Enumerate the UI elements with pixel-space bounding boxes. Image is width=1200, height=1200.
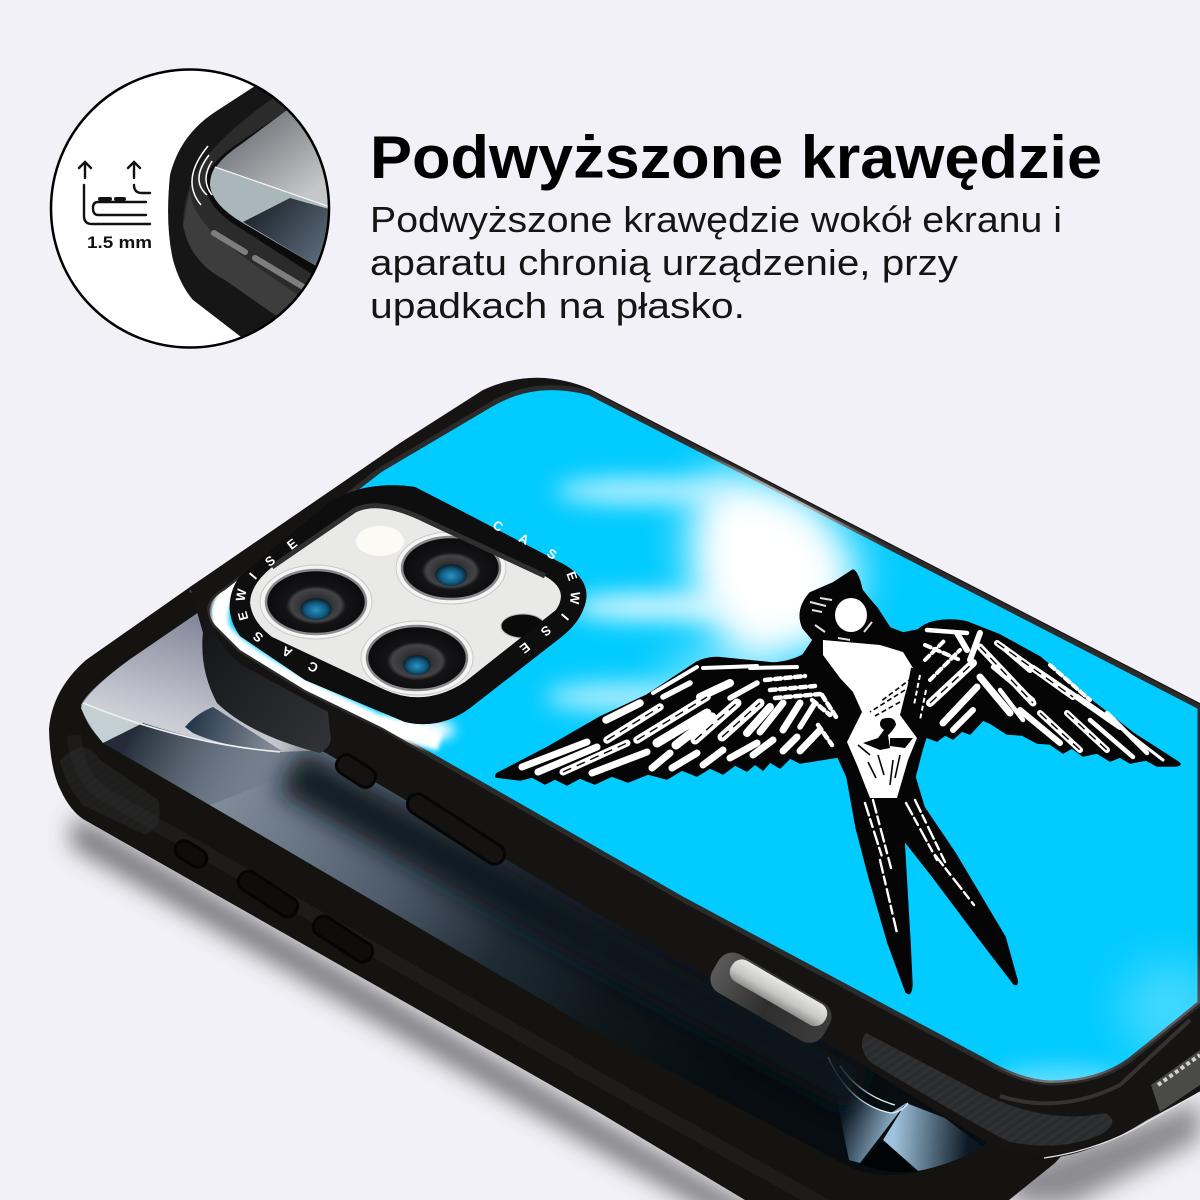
icon label: 1.5 mm: 1.5 mm	[87, 233, 152, 252]
ring lettering: CASEWISE: E	[563, 569, 581, 583]
head flecks	[810, 598, 872, 640]
flash	[356, 526, 404, 556]
description text: aparatu chronią urządzenie, przy	[370, 242, 958, 283]
side wall shadow of upper phone	[290, 770, 860, 1090]
shadow beneath phones	[70, 815, 1200, 1200]
bird belly	[823, 640, 917, 798]
lens 1	[260, 565, 372, 639]
bottom corner bumper	[862, 1033, 1112, 1146]
ring lettering: CASEWISE: E	[235, 610, 251, 622]
lens 3	[361, 621, 473, 695]
ring lettering: CASEWISE: W	[567, 591, 583, 605]
ring lettering: CASEWISE: I	[246, 570, 260, 582]
lower phone corner bumper	[60, 748, 160, 835]
bird silhouette	[496, 570, 1180, 993]
ring lettering: CASEWISE: A	[516, 530, 532, 548]
clouds	[220, 470, 1200, 1103]
ring lettering: CASEWISE: S	[544, 545, 560, 563]
description text: upadkach na płasko.	[370, 285, 745, 326]
inset circle: raised edge detail	[51, 70, 345, 348]
icon: 1.5 mm raised edge diagram	[79, 162, 150, 224]
ring lettering: CASEWISE: E	[284, 535, 300, 553]
screen glass wedge	[81, 703, 143, 743]
upper phone: case back	[190, 378, 1200, 1158]
dark reflection blob	[185, 707, 282, 751]
dark screen area below reflection	[103, 723, 300, 805]
screen glass reflection	[83, 495, 370, 752]
feather shaft hatching	[563, 643, 1107, 772]
phone back artwork: blue sky	[209, 388, 1200, 1083]
swallow illustration	[496, 570, 1180, 993]
charging port	[705, 947, 837, 1049]
ring lettering: CASEWISE: E	[517, 639, 533, 657]
description text: Podwyższone krawędzie wokół ekranu i	[370, 199, 1062, 240]
camera module	[230, 485, 586, 724]
left wing white feathers	[522, 666, 838, 773]
ring lettering: CASEWISE: S	[262, 552, 278, 570]
ring lettering: CASEWISE: W	[233, 587, 250, 602]
ring lettering: CASEWISE: I	[558, 611, 572, 623]
bird cheek	[835, 598, 867, 632]
ring lettering: CASEWISE: S	[250, 628, 266, 646]
upper phone side buttons	[333, 751, 508, 868]
speaker grille	[1151, 1050, 1200, 1112]
ring lettering: CASEWISE: C	[305, 658, 321, 676]
lidar sensor	[501, 614, 545, 638]
camera glass plate	[250, 506, 561, 697]
screen reflection lower right	[828, 1057, 983, 1172]
ring lettering: CASEWISE: S	[538, 622, 554, 640]
lower phone: front with screen	[49, 470, 1200, 1200]
ring lettering: CASEWISE: A	[279, 643, 295, 661]
belly hatching and mark	[858, 668, 926, 785]
right wing white feathers	[925, 630, 1163, 760]
lower phone screen	[81, 495, 1100, 1175]
camera bumper corner	[202, 610, 331, 753]
ring lettering: CASEWISE: C	[490, 517, 506, 535]
lens 2	[396, 532, 506, 604]
description text	[370, 199, 1062, 326]
inner rim of ring	[272, 506, 545, 576]
camera ring	[230, 485, 586, 724]
ring lettering: CASEWISE	[233, 517, 583, 676]
heading: Podwyższone krawędzie	[370, 124, 1102, 191]
lower phone side buttons	[172, 837, 376, 965]
white sliver around the camera	[220, 490, 440, 742]
tail feather highlights	[865, 800, 974, 933]
